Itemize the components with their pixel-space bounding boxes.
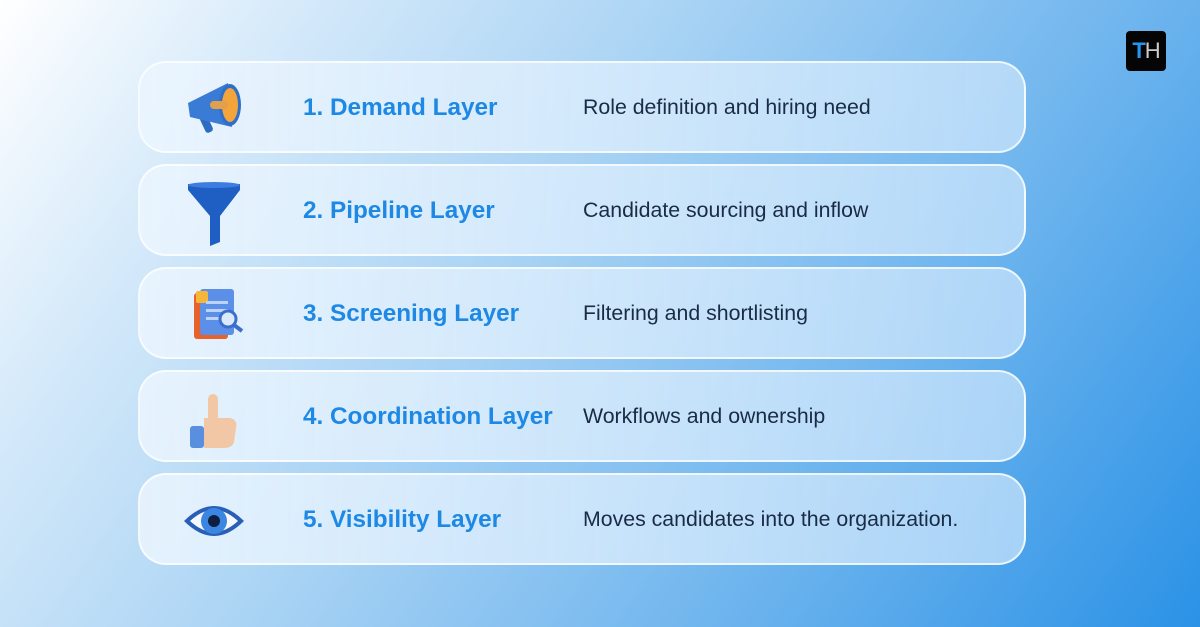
panel: pipeline layer (138, 164, 1026, 256)
panel: demand layer (138, 61, 1026, 153)
title: 3. Screening Layer (303, 300, 519, 327)
title: 2. Pipeline Layer (303, 197, 495, 224)
description: Workflows and ownership (583, 404, 825, 428)
logo: TH (1132, 38, 1160, 63)
icon: funnel (188, 182, 240, 246)
logo (1126, 31, 1166, 71)
panel: screening layer (138, 267, 1026, 359)
icon: documents with magnifier (194, 289, 244, 339)
icon: thumbs up (190, 394, 236, 448)
description: Filtering and shortlisting (583, 301, 808, 325)
description: Role definition and hiring need (583, 95, 871, 119)
icon: eye (184, 506, 244, 536)
panel: visibility layer (138, 473, 1026, 565)
description: Candidate sourcing and inflow (583, 198, 868, 222)
panel: coordination layer (138, 370, 1026, 462)
icon: megaphone (188, 83, 241, 133)
description: Moves candidates into the organization. (583, 507, 958, 531)
title: 4. Coordination Layer (303, 403, 553, 430)
title: 5. Visibility Layer (303, 506, 501, 533)
title: 1. Demand Layer (303, 94, 497, 121)
